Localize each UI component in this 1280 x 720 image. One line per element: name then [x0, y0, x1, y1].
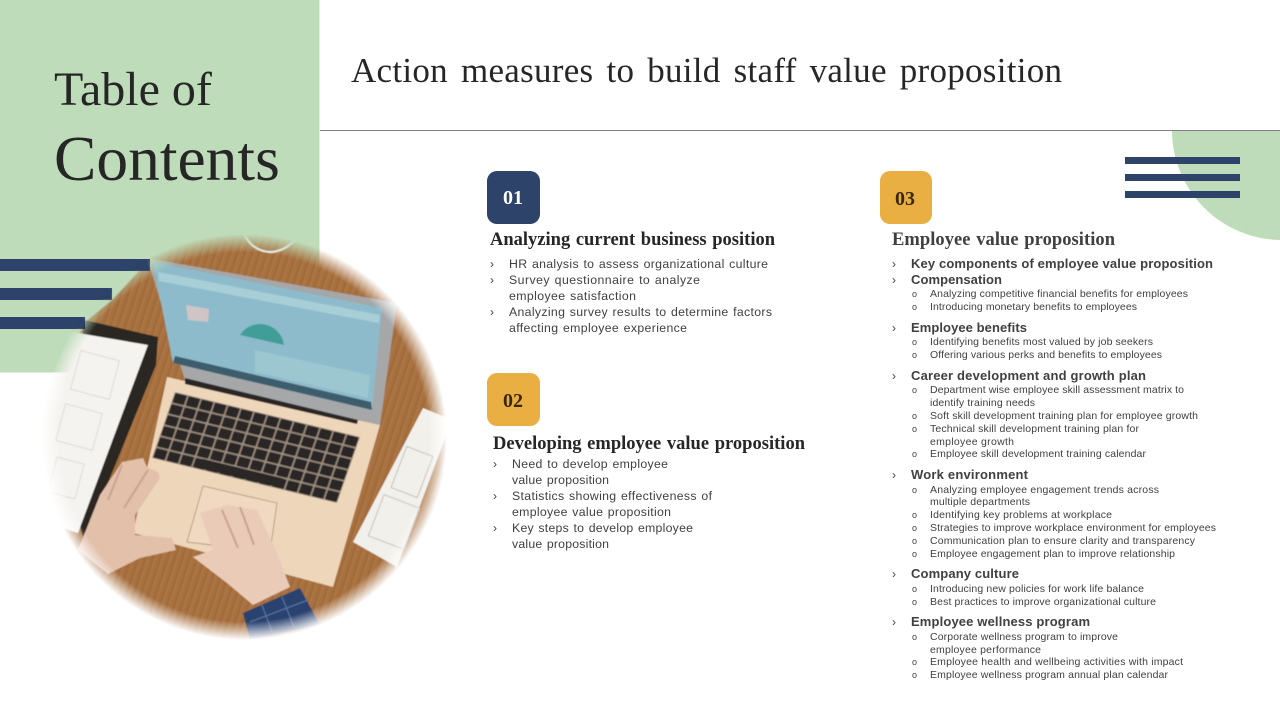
list 03: Strategies to improve workplace environment for employees — [930, 522, 1216, 534]
list 03: o — [912, 584, 917, 594]
heading 03: Employee value proposition — [892, 230, 1116, 250]
list 03: Introducing new policies for work life balance — [930, 583, 1144, 595]
list 01: employee satisfaction — [509, 289, 636, 303]
list 03: Employee wellness program — [911, 614, 1090, 629]
left navy stripes — [0, 259, 150, 329]
badge 02: 02 — [503, 390, 523, 412]
sleeve — [243, 588, 320, 640]
list 03: o — [912, 411, 917, 421]
heading 02: Developing employee value proposition — [493, 434, 806, 454]
title: Table of Contents — [54, 63, 280, 194]
list 02: value proposition — [512, 473, 609, 487]
section 03 — [880, 171, 1216, 681]
green corner behind the photo top left — [72, 270, 138, 334]
title: Table of Contents: Contents — [54, 123, 280, 194]
list 03: › — [892, 273, 896, 287]
list 02 — [493, 457, 713, 551]
list 03: Employee health and wellbeing activities with impact — [930, 656, 1183, 668]
list 03: o — [912, 523, 917, 533]
badge 01: 01 — [503, 187, 523, 209]
list 01: › — [490, 273, 494, 287]
main heading: Action measures to build staff value proposition — [351, 51, 1062, 90]
list 01: HR analysis to assess organizational culture — [509, 257, 768, 271]
list 03 — [892, 256, 1216, 681]
badge 03 — [880, 171, 932, 224]
list 03: › — [892, 257, 896, 271]
list 03: › — [892, 615, 896, 629]
list 03: o — [912, 449, 917, 459]
list 03: o — [912, 632, 917, 642]
laptop screen — [153, 262, 382, 410]
list 03: Compensation — [911, 272, 1002, 287]
right paper — [353, 408, 452, 567]
list 02: › — [493, 521, 497, 535]
list 03: o — [912, 302, 917, 312]
list 03: o — [912, 536, 917, 546]
list 03: o — [912, 657, 917, 667]
list 03: o — [912, 549, 917, 559]
screen content — [158, 272, 380, 410]
list 02: Statistics showing effectiveness of — [512, 489, 713, 503]
keyboard — [152, 392, 360, 503]
list 03: Identifying benefits most valued by job seekers — [930, 336, 1153, 348]
list 03: Introducing monetary benefits to employees — [930, 301, 1137, 313]
list 02: › — [493, 457, 497, 471]
list 03: o — [912, 670, 917, 680]
list 03: Employee skill development training calendar — [930, 448, 1146, 460]
list 02: › — [493, 489, 497, 503]
list 01 — [490, 257, 772, 335]
list 03: o — [912, 510, 917, 520]
list 03: › — [892, 321, 896, 335]
list 02: Need to develop employee — [512, 457, 668, 471]
list 03: Employee benefits — [911, 320, 1027, 335]
header divider line — [320, 130, 1280, 131]
list 02: Key steps to develop employee — [512, 521, 693, 535]
left paper — [38, 332, 148, 533]
list 01: Analyzing survey results to determine factors — [509, 305, 772, 319]
badge 02 — [487, 373, 540, 426]
left hand — [78, 458, 176, 574]
right paper sketches — [368, 446, 433, 549]
list 01: affecting employee experience — [509, 321, 687, 335]
list 03: Analyzing employee engagement trends across — [930, 484, 1159, 496]
list 03: › — [892, 567, 896, 581]
list 03: o — [912, 424, 917, 434]
section 01 — [487, 171, 776, 335]
list 03: Employee wellness program annual plan calendar — [930, 669, 1168, 681]
trackpad — [187, 486, 277, 552]
list 03: employee growth — [930, 436, 1014, 448]
list 03: Corporate wellness program to improve — [930, 631, 1118, 643]
dark folder — [80, 320, 158, 538]
list 03: Department wise employee skill assessment matrix to — [930, 384, 1184, 396]
top right navy stripes — [1125, 157, 1240, 198]
list 03: o — [912, 337, 917, 347]
list 03: o — [912, 597, 917, 607]
right hand — [193, 505, 290, 605]
stripes continuing under the photo edge — [74, 260, 150, 330]
badge 03: 03 — [895, 188, 915, 210]
list 03: o — [912, 385, 917, 395]
hinge — [185, 378, 358, 424]
list 03: › — [892, 369, 896, 383]
left paper sketches — [48, 351, 119, 499]
list 03: Key components of employee value proposition — [911, 256, 1213, 271]
list 03: o — [912, 289, 917, 299]
laptop lid — [147, 258, 397, 425]
green title panel — [0, 0, 320, 372]
list 02: employee value proposition — [512, 505, 671, 519]
list 03: Company culture — [911, 566, 1019, 581]
list 03: Analyzing competitive financial benefits for employees — [930, 288, 1188, 300]
badge 01 — [487, 171, 540, 224]
list 03: identify training needs — [930, 397, 1035, 409]
list 03: o — [912, 350, 917, 360]
list 03: Work environment — [911, 467, 1029, 482]
list 01: Survey questionnaire to analyze — [509, 273, 700, 287]
list 03: Best practices to improve organizational culture — [930, 596, 1156, 608]
wood desk — [64, 235, 446, 639]
section 02 — [487, 373, 806, 551]
list 02: value proposition — [512, 537, 609, 551]
heading 01: Analyzing current business position — [490, 230, 776, 250]
list 03: Technical skill development training plan for — [930, 423, 1140, 435]
list 01: › — [490, 305, 494, 319]
list 03: employee performance — [930, 644, 1041, 656]
list 03: o — [912, 485, 917, 495]
list 03: Offering various perks and benefits to employees — [930, 349, 1162, 361]
list 03: Identifying key problems at workplace — [930, 509, 1112, 521]
list 03: Career development and growth plan — [911, 368, 1146, 383]
list 01: › — [490, 257, 494, 271]
list 03: Employee engagement plan to improve relationship — [930, 548, 1175, 560]
list 03: multiple departments — [930, 496, 1030, 508]
laptop base — [133, 377, 380, 587]
white cable — [244, 235, 294, 254]
list 03: › — [892, 468, 896, 482]
top right green circle — [1172, 131, 1280, 240]
list 03: Communication plan to ensure clarity and transparency — [930, 535, 1196, 547]
circular photo: hands on laptop — [50, 235, 446, 639]
title: Table of Contents: Table of — [54, 63, 212, 116]
list 03: Soft skill development training plan for employee growth — [930, 410, 1198, 422]
